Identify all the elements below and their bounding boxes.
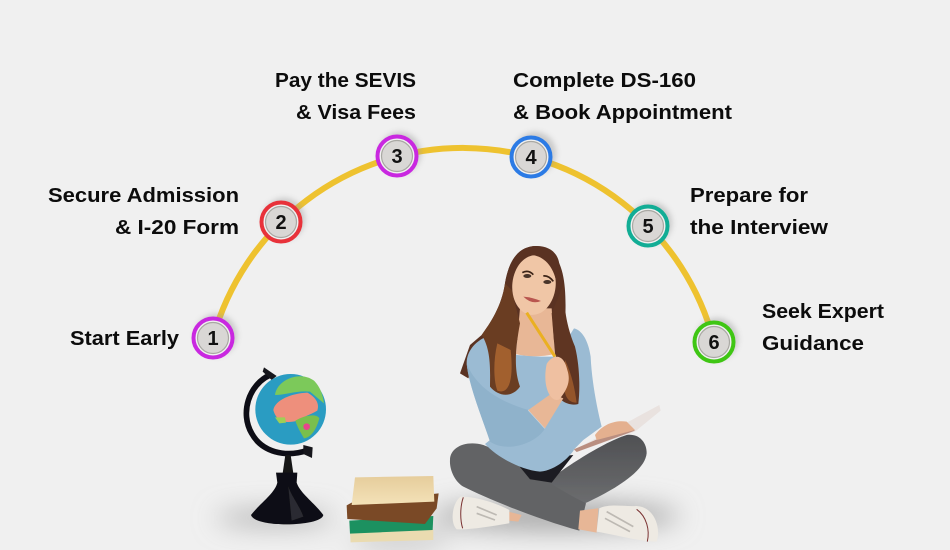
label: step 5: the Interview xyxy=(690,217,828,239)
floor shadow xyxy=(215,502,680,545)
student figure xyxy=(450,246,661,542)
timeline arc xyxy=(213,148,714,342)
face xyxy=(509,253,559,317)
step 2 marker xyxy=(262,198,305,242)
label: step 1: Start Early xyxy=(70,328,180,350)
legs xyxy=(540,435,647,503)
step 3 marker: 3 xyxy=(391,146,403,168)
step 5 marker: 5 xyxy=(642,216,654,238)
label: step 3: Pay the SEVIS xyxy=(275,70,416,92)
right shoe xyxy=(597,505,658,542)
label: step 5 xyxy=(690,185,828,239)
step 4 marker xyxy=(512,132,556,176)
label: step 4: & Book Appointment xyxy=(513,102,732,124)
stack of books xyxy=(347,476,439,542)
raised forearm and hand xyxy=(528,357,569,428)
left shoe xyxy=(453,497,509,529)
sweater xyxy=(467,328,602,472)
step 1 marker: 1 xyxy=(207,328,219,350)
label: step 4 xyxy=(513,70,732,124)
ankles xyxy=(508,508,598,533)
label: step 3: & Visa Fees xyxy=(296,102,416,124)
label: step 5: Prepare for xyxy=(690,185,808,207)
label: step 6: Seek Expert xyxy=(762,301,884,323)
label: step 2: Secure Admission xyxy=(48,185,239,207)
label: step 4: Complete DS-160 xyxy=(513,70,696,92)
label: step 2: & I-20 Form xyxy=(115,217,239,239)
step 6 marker: 6 xyxy=(708,332,720,354)
neck and chest xyxy=(516,308,555,356)
step 3 marker xyxy=(378,132,421,176)
sleeve xyxy=(467,363,545,447)
step 5 marker xyxy=(628,202,672,246)
label: step 3 xyxy=(275,70,416,124)
step 1 marker xyxy=(194,314,237,358)
label: step 6 xyxy=(762,301,884,355)
black undershirt xyxy=(518,455,573,483)
step 6 marker xyxy=(694,318,738,362)
notebook and hand xyxy=(573,405,661,452)
hair back xyxy=(460,246,566,378)
step 4 marker: 4 xyxy=(525,147,537,169)
hair front xyxy=(482,283,520,395)
globe illustration xyxy=(246,367,326,524)
label: step 2 xyxy=(48,185,239,239)
label: step 6: Guidance xyxy=(762,333,864,355)
step 2 marker: 2 xyxy=(275,212,287,234)
pencil xyxy=(527,313,555,357)
